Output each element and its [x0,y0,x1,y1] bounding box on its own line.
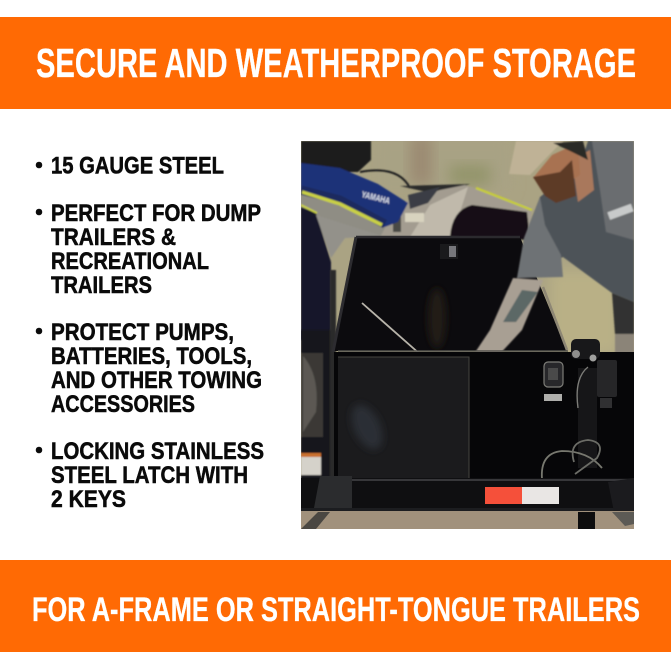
header banner [0,17,671,109]
tattooed arm [476,277,542,350]
cap [509,141,563,175]
bullet: dump and recreational trailers [36,200,261,299]
trailer jack and cables [542,339,617,479]
torso [539,141,634,302]
bullet: locking latch: LOCKING STAINLESS [51,438,264,465]
toolbox lid open [333,237,567,355]
bullet: dump and recreational trailers: PERFECT FOR DUMP [51,200,261,227]
bullet: protect accessories: PROTECT PUMPS, [51,319,234,346]
ground and jack post [301,511,634,529]
toolbox body [334,351,634,480]
bullet: dump and recreational trailers: RECREATIONAL [51,248,209,275]
bullet: protect accessories: ACCESSORIES [51,391,195,418]
blue tank [301,163,408,228]
bullet: protect accessories: AND OTHER TOWING [51,367,262,394]
warning sticker [301,453,321,475]
seat [301,141,371,172]
bullet: 15 gauge steel: 15 GAUGE STEEL [51,152,224,180]
bullet: protect accessories [36,319,262,418]
brand plate [544,394,562,401]
reflective tape [485,487,522,504]
bullet: locking latch: STEEL LATCH WITH [51,462,248,489]
ATV [301,141,532,340]
trailer frame [301,476,634,512]
stainless latch [544,362,563,387]
product photo: man opening trailer toolbox in front of ATV [301,135,634,529]
bullet: dump and recreational trailers: TRAILERS [51,272,152,299]
footer banner [0,560,671,652]
fender [380,185,532,240]
ATV: YAMAHA [361,189,391,206]
sleeve [517,197,563,278]
man with cap and grey polo [472,141,634,357]
neck [572,150,594,202]
photo background [301,141,634,478]
feature bullet list [36,152,264,513]
trousers [612,293,634,334]
shirt logo [607,204,634,220]
bullet: locking latch [36,438,264,513]
ATV tire and frame [301,270,336,480]
bullet: protect accessories: BATTERIES, TOOLS, [51,343,252,370]
bullet: locking latch: 2 KEYS [51,486,126,513]
face and beard [534,148,580,179]
bullet: dump and recreational trailers: TRAILERS & [51,224,176,251]
